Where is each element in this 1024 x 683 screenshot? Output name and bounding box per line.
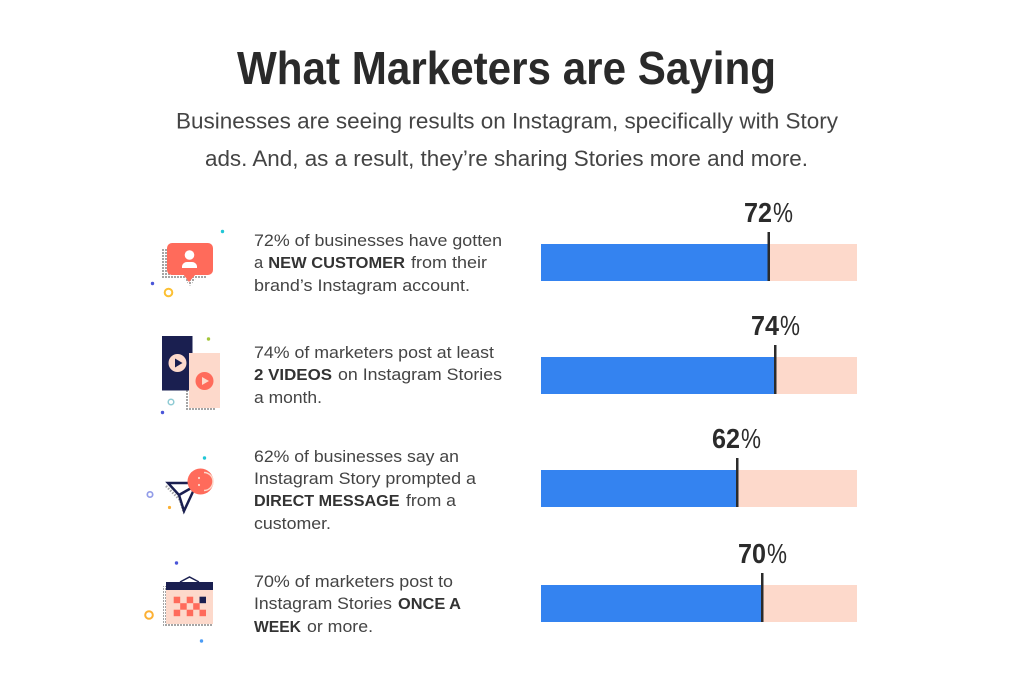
icon: profile speech bubble [151,230,224,296]
icon: video cards [161,336,220,414]
text: videos [254,344,502,407]
text: new customer: brand’s Instagram account. [254,277,470,295]
subtitle [176,108,839,171]
subtitle: ads. And, as a result, they’re sharing Stories more and more. [205,146,808,171]
text: videos: 2 VIDEOS [254,367,332,384]
text: direct message: DIRECT MESSAGE [254,493,400,510]
bar: 70%: 70 [738,538,766,569]
bar: 62%: % [741,423,761,454]
row 4: once a week [145,538,857,643]
text: once a week: or more. [307,618,373,636]
bar: 72%: 72 [744,197,772,228]
row 1: new customer [151,197,857,296]
text: direct message: Instagram Story prompted a [254,470,477,488]
title: What Marketers are Saying [237,42,776,94]
bar: 72%: % [773,197,793,228]
text: videos: a month. [254,389,322,407]
text: new customer [254,232,502,295]
bar: 62% [541,423,857,507]
text: videos: 74% of marketers post at least [254,344,494,362]
text: once a week: WEEK [254,619,301,636]
row 2: videos [161,310,857,414]
text: once a week [254,573,461,636]
bar: 70% [541,538,857,622]
text: once a week: ONCE A [398,596,461,613]
bar: 70%: % [767,538,787,569]
icon: calendar [145,561,213,643]
bar: 72% [541,197,857,281]
bar: 74%: 74 [751,310,780,341]
icon: paper plane with smiley [147,456,214,513]
text: direct message: from a [406,492,457,510]
text: direct message: customer. [254,515,331,533]
bar: 74%: % [780,310,800,341]
bar: 74% [541,310,857,394]
text: new customer: from their [411,254,488,272]
text: direct message [254,448,477,533]
text: once a week: Instagram Stories [254,595,392,613]
text: new customer: a [254,254,264,272]
text: new customer: 72% of businesses have gotten [254,232,502,250]
text: new customer: NEW CUSTOMER [268,255,405,272]
text: direct message: 62% of businesses say an [254,448,459,466]
row 3: direct message [147,423,857,533]
text: videos: on Instagram Stories [338,366,502,384]
subtitle: Businesses are seeing results on Instagram, specifically with Story [176,108,839,134]
bar: 62%: 62 [712,423,740,454]
text: once a week: 70% of marketers post to [254,573,453,591]
